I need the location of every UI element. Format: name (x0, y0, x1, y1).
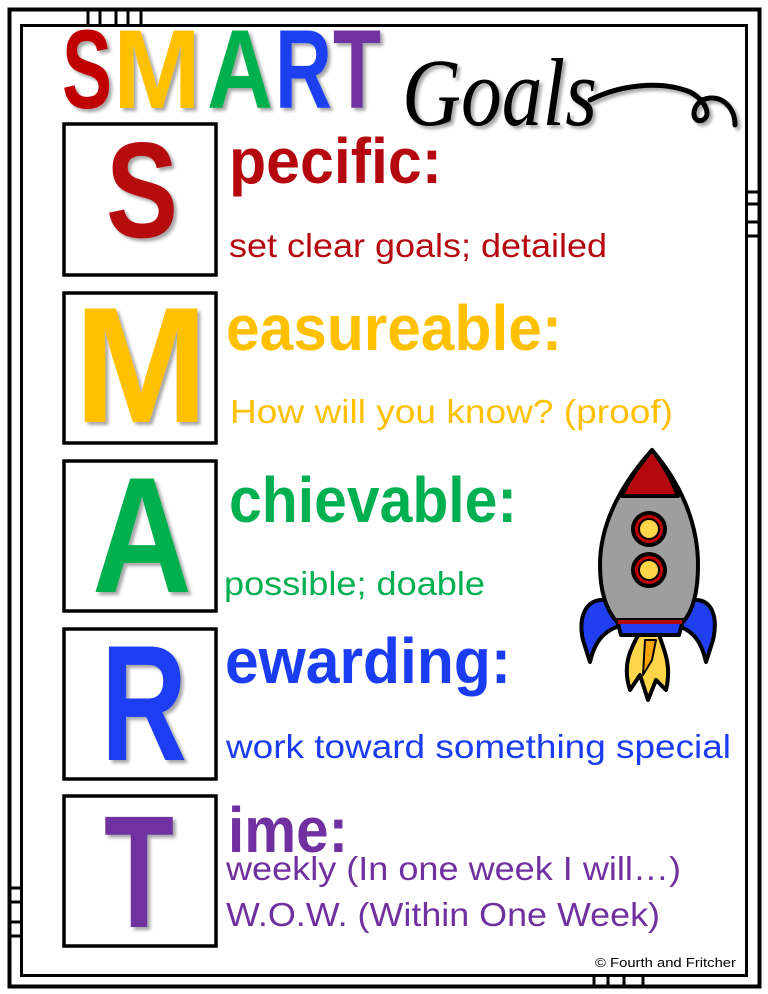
headings (225, 125, 562, 866)
title: SMART: R (275, 7, 332, 132)
copyright: © Fourth and Fritcher (595, 955, 737, 970)
title: Goals: Goals (402, 39, 597, 146)
headings: chievable: (229, 464, 517, 536)
big letters: M (74, 273, 208, 457)
big letters: T (104, 782, 174, 961)
descriptions: set clear goals; detailed (229, 227, 607, 264)
descriptions: How will you know? (proof) (230, 393, 673, 430)
icon: rocket (581, 450, 715, 700)
headings: ime: (228, 794, 348, 866)
descriptions (224, 227, 731, 933)
descriptions: work toward something special (225, 728, 731, 765)
headings: ewarding: (225, 625, 511, 697)
descriptions: possible; doable (224, 565, 485, 602)
big letters (74, 114, 208, 961)
big letters: S (106, 114, 178, 266)
title: SMART: M (113, 7, 201, 132)
letter boxes (64, 124, 216, 946)
title: Goals (402, 39, 735, 146)
headings: easureable: (226, 292, 562, 364)
title: SMART: A (207, 7, 273, 132)
big letters: R (101, 611, 187, 795)
descriptions: W.O.W. (Within One Week) (226, 896, 660, 933)
big letters: A (92, 443, 192, 627)
title: SMART (62, 7, 381, 132)
descriptions: weekly (In one week I will…) (225, 850, 681, 887)
title: SMART: S (62, 7, 112, 132)
headings: pecific: (229, 125, 442, 197)
title: SMART: T (333, 7, 381, 132)
